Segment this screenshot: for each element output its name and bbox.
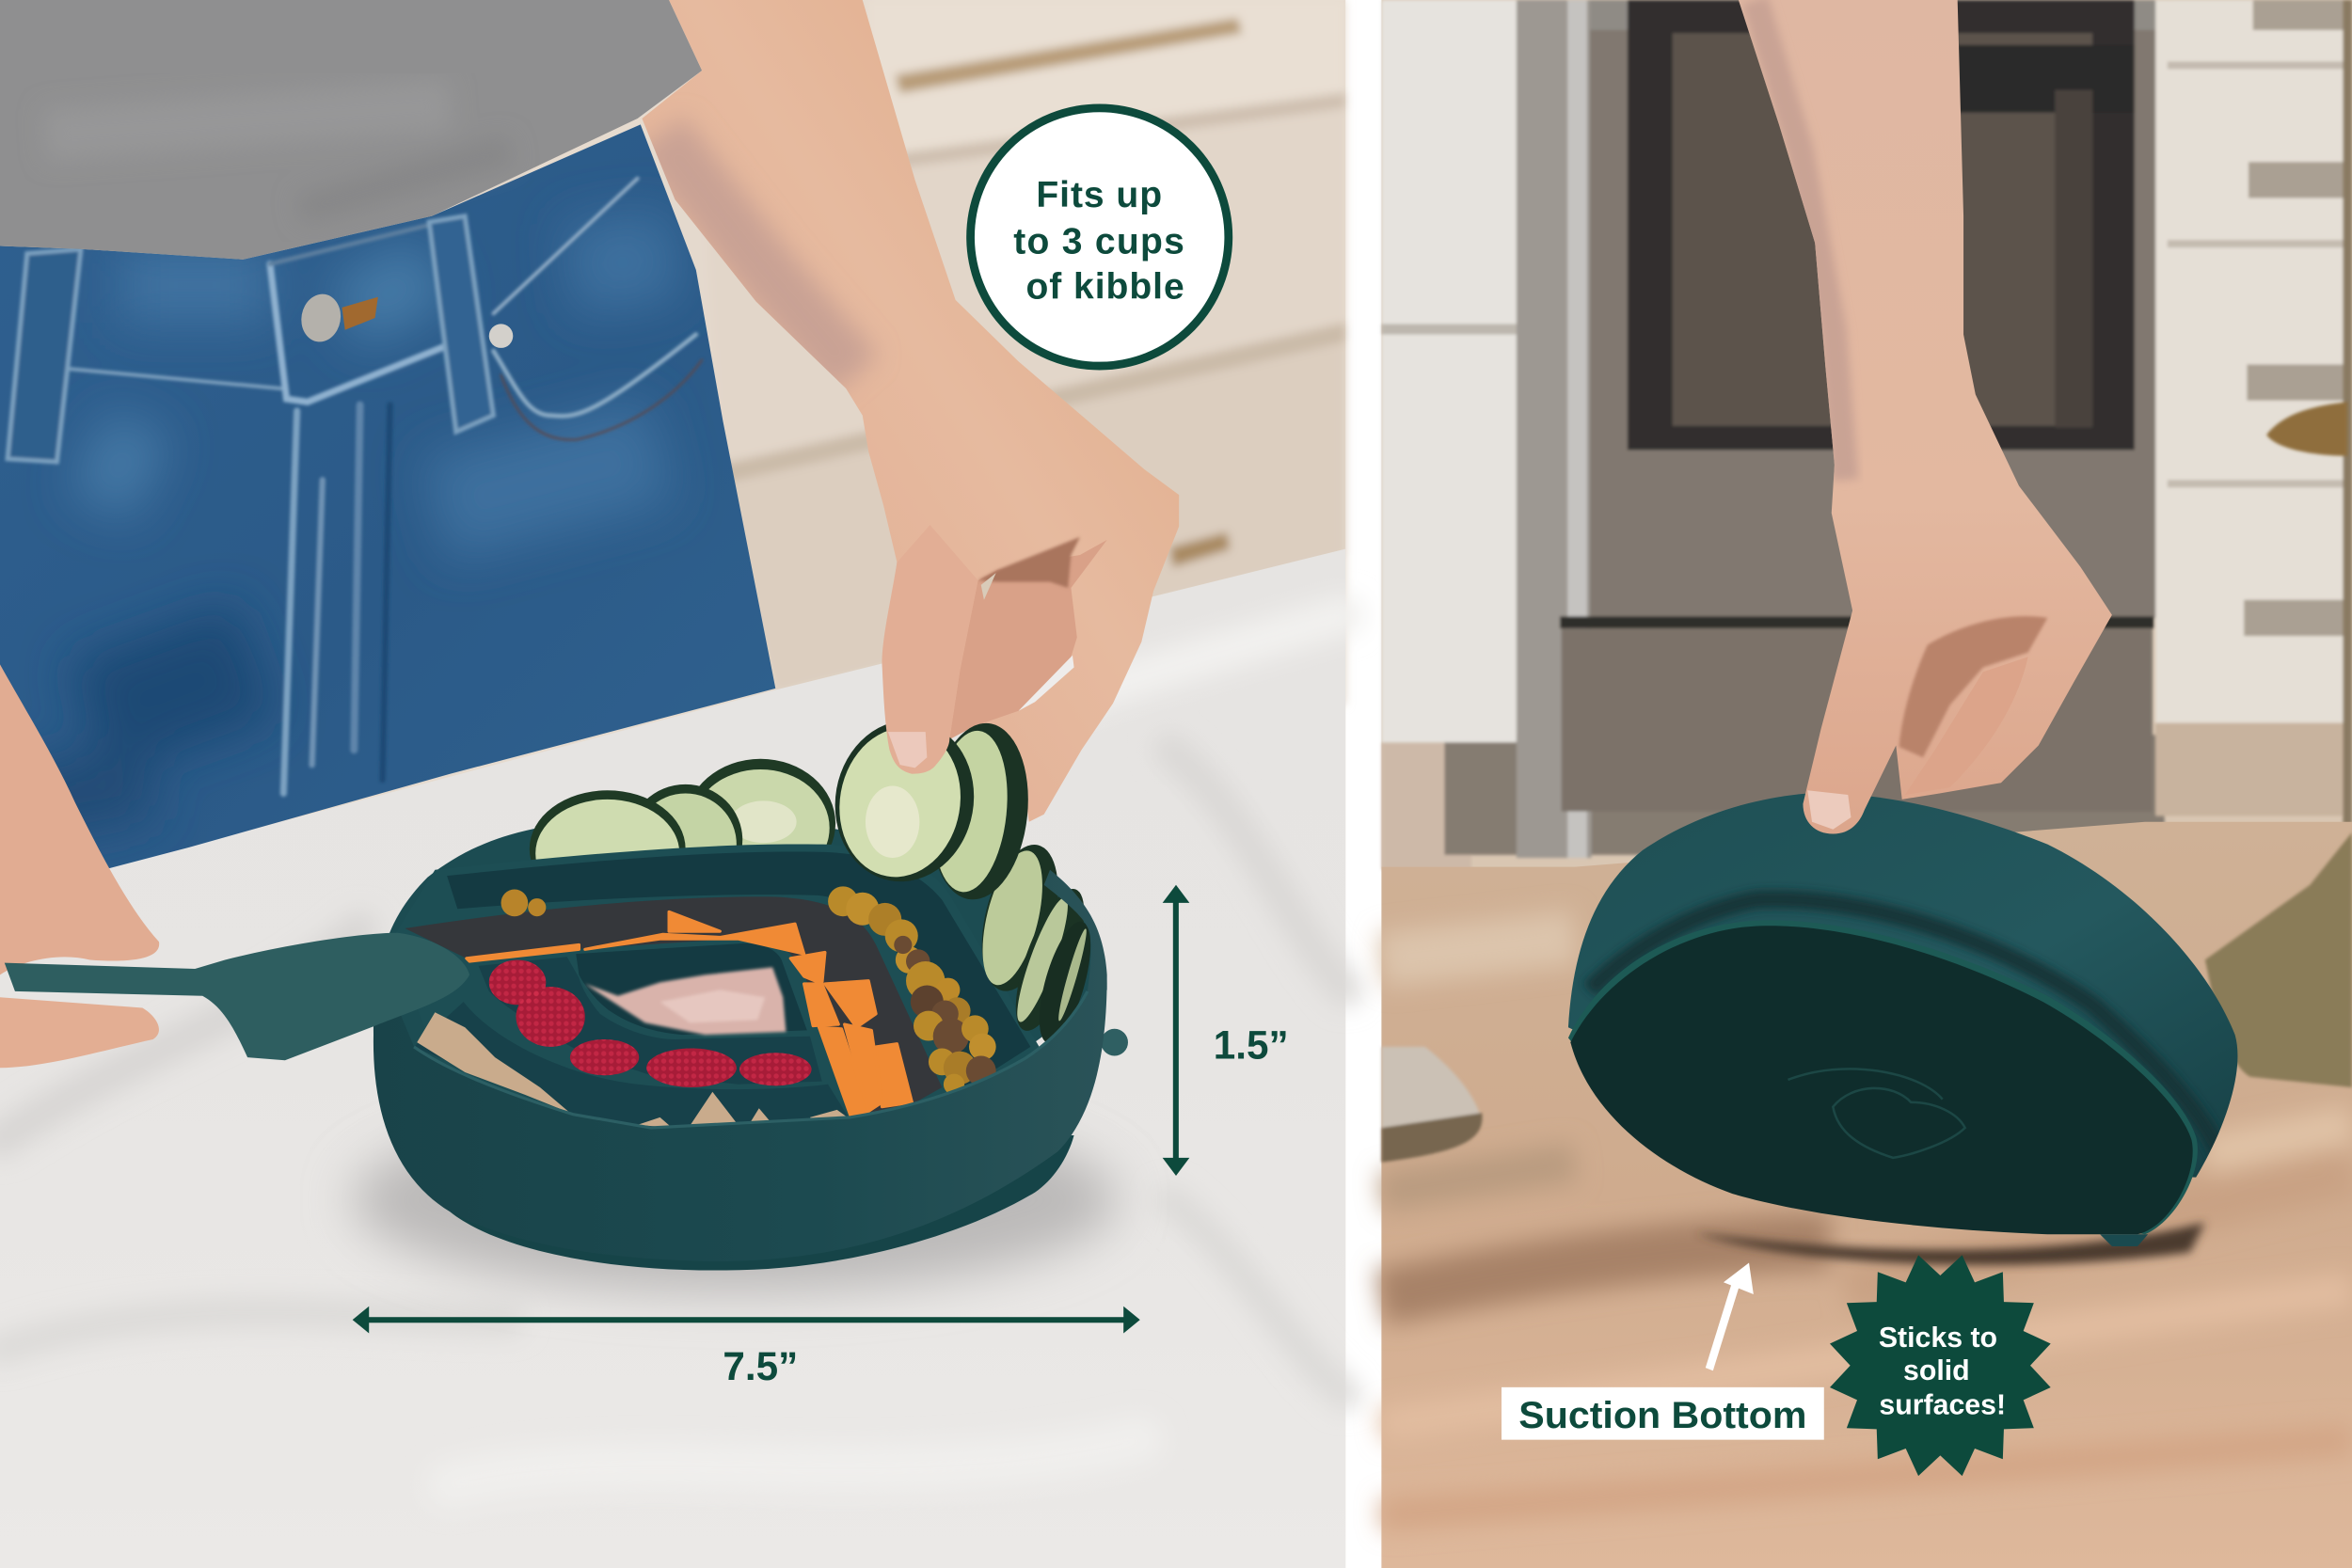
callout: capacity: to 3 cups	[1013, 221, 1185, 261]
label: Suction Bottom	[1502, 1387, 1824, 1440]
callout: capacity: of kibble	[1025, 266, 1185, 307]
rim	[374, 823, 1107, 1140]
right arm and hand	[642, 0, 1179, 904]
thumb	[882, 525, 978, 774]
bottom cell	[414, 1002, 848, 1128]
callout: capacity: Fits up	[1036, 175, 1163, 215]
gaps between fingers	[981, 573, 996, 600]
suction tab	[2100, 1234, 2148, 1246]
panel: left photo, bowl on counter	[0, 0, 1345, 1568]
arrow: height 1.5 in	[1163, 885, 1189, 1176]
arm and hand lifting the bowl	[1739, 0, 2112, 834]
kitchen background	[1381, 0, 2352, 870]
bowl wall shadow above lip	[1590, 899, 2220, 1155]
forearm shadow	[1755, 0, 1845, 480]
thumbnail	[1807, 790, 1851, 830]
panel: right photo, suction bottom	[1381, 0, 2352, 1568]
suction tab	[1101, 1029, 1128, 1055]
tuna	[585, 967, 786, 1035]
left hand	[0, 664, 159, 1068]
stool, brass base and footrest	[2205, 402, 2352, 1087]
forearm shadow	[660, 135, 855, 375]
wood floor	[1381, 822, 2352, 1568]
berry cell	[479, 957, 822, 1085]
background cabinets	[660, 0, 1345, 705]
cucumber slices, rear	[530, 759, 835, 908]
tray walls	[393, 845, 1041, 1102]
badge: starburst	[1830, 1255, 2051, 1476]
underside disc	[1570, 926, 2193, 1234]
carrot channel	[405, 896, 942, 1117]
outer wall front	[373, 870, 1107, 1261]
raspberries	[489, 959, 812, 1087]
kibble channel	[447, 851, 1030, 1092]
jeans	[0, 124, 775, 896]
label: width: 7.5”	[723, 1344, 798, 1388]
badge: starburst: solid	[1903, 1355, 1970, 1386]
spatula	[5, 933, 469, 1060]
callout: capacity	[971, 108, 1229, 366]
carrots	[467, 911, 912, 1116]
cucumber slices, side	[968, 837, 1101, 1048]
arrow pointing to suction bottom	[1706, 1263, 1754, 1370]
cucumber slices held in fingers	[822, 709, 1037, 904]
rim lip	[1568, 920, 2198, 1234]
bowl tilted to show suction bottom	[1568, 793, 2237, 1246]
marble counter	[0, 549, 1345, 1568]
chicken pieces	[417, 1012, 848, 1128]
badge: starburst: surfaces!	[1879, 1390, 2006, 1421]
bowl shadow on counter	[353, 1107, 1118, 1292]
bowl with divided compartments	[373, 759, 1128, 1271]
embossed logo	[1788, 1069, 1965, 1158]
arrow: width 7.5 in	[353, 1307, 1140, 1333]
base lip	[450, 1135, 1074, 1271]
kibble	[501, 886, 996, 1095]
tuna cell	[576, 943, 807, 1035]
bowl wall	[1568, 793, 2237, 1178]
finger crease	[1899, 616, 2047, 757]
grey t-shirt	[0, 0, 702, 260]
label: Suction Bottom: Suction Bottom	[1518, 1395, 1806, 1436]
label: height: 1.5”	[1214, 1023, 1289, 1068]
folded fingers	[949, 540, 1107, 739]
shoe	[1381, 1047, 1483, 1163]
badge: starburst: Sticks to	[1879, 1323, 1997, 1354]
